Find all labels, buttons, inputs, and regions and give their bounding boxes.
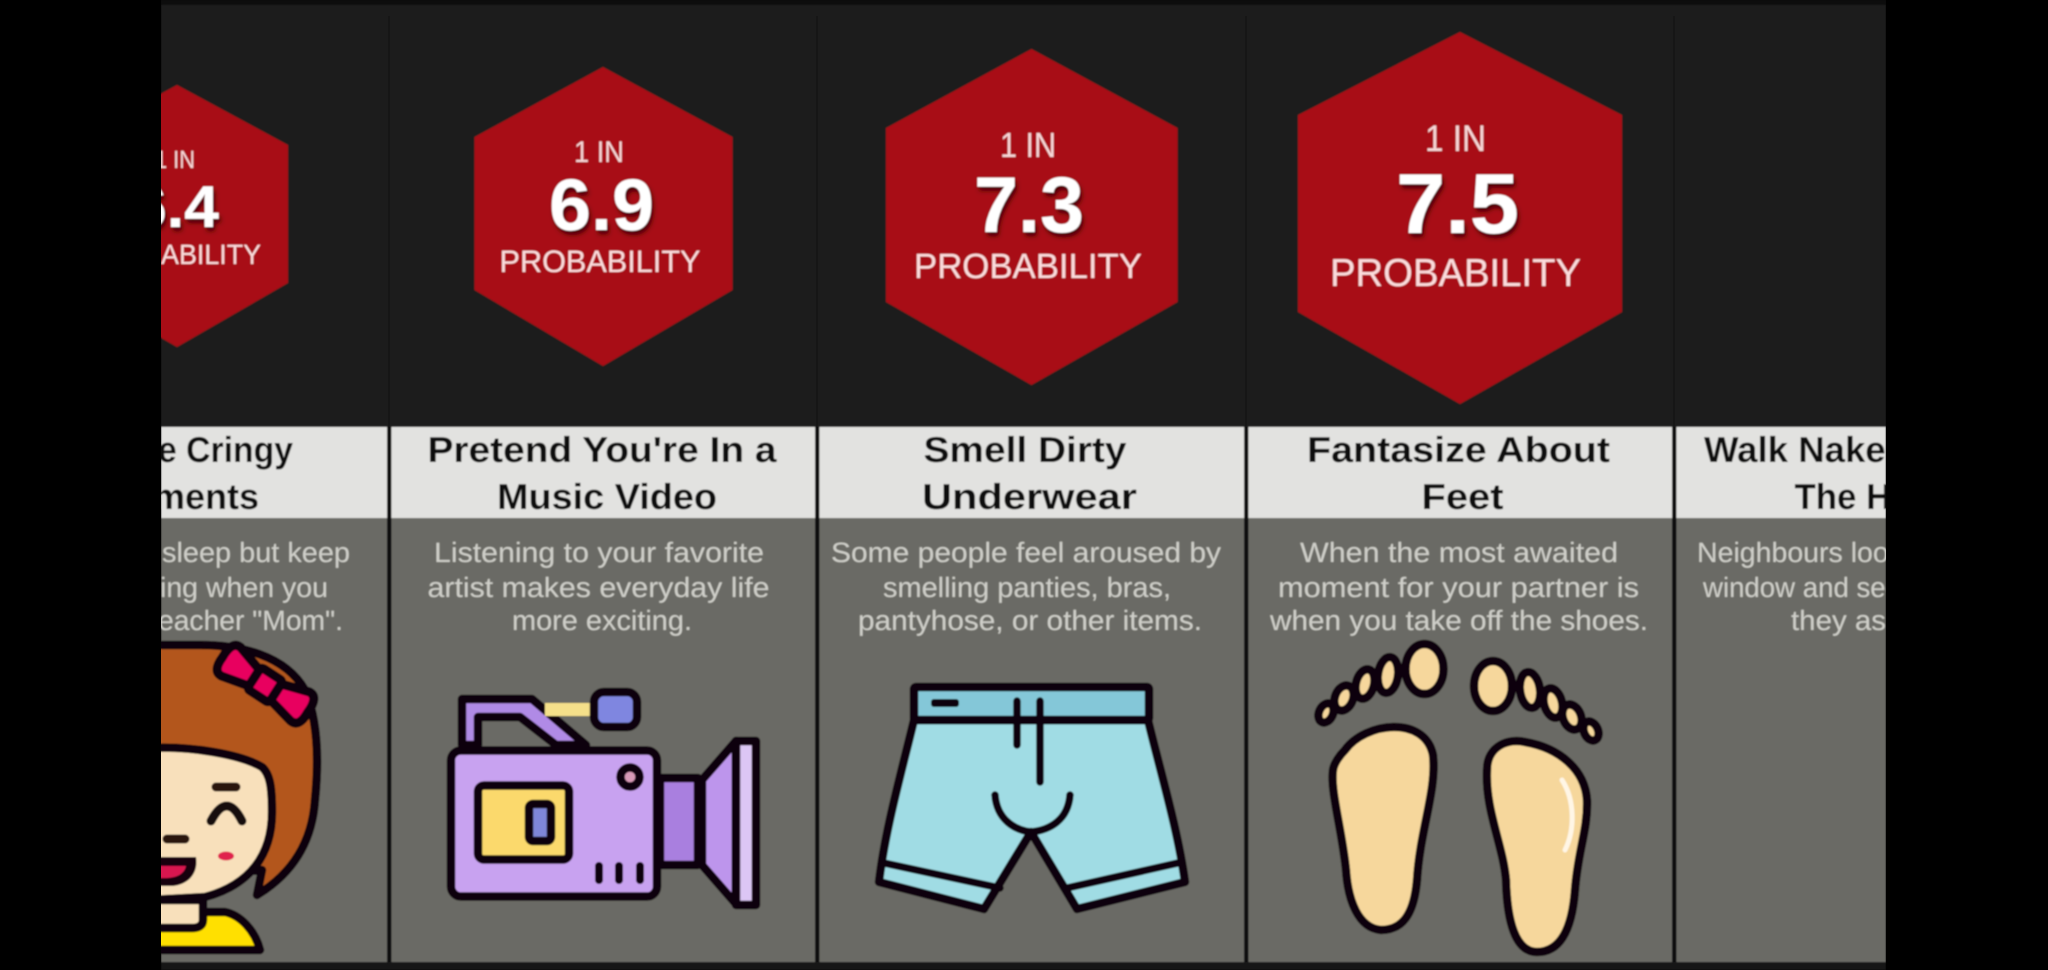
hexagon badge: 1 in 7.3: 7.3: [974, 160, 1084, 249]
hexagon badge: 1 in 6.4: 1 IN: [155, 146, 195, 174]
hexagon badge: 1 in 7.3: [886, 49, 1178, 385]
hexagon badge: 1 in 7.3: 1 IN: [1000, 126, 1056, 165]
title: [161, 434, 294, 510]
description: artist makes everyday life: [428, 572, 770, 603]
description: Some people feel aroused by: [831, 537, 1221, 568]
hexagon badge: 1 in 6.9: PROBABILITY: [500, 244, 700, 279]
hexagon badge: 1 in 6.4: [161, 84, 290, 348]
hexagon badge: 1 in 6.9: [474, 67, 732, 366]
hexagon badge: 1 in 6.9: 6.9: [549, 165, 654, 246]
title: [924, 434, 1138, 510]
hexagon badge: 1 in 7.5: PROBABILITY: [1330, 252, 1581, 295]
title: Underwear: [922, 476, 1137, 517]
description: eacher "Mom".: [158, 605, 343, 636]
description: When the most awaited: [1300, 537, 1618, 568]
title: ments: [153, 476, 259, 517]
icon: video camera: [451, 692, 756, 905]
description: more exciting.: [512, 605, 692, 636]
panel: pretend you're in a music video: [428, 67, 778, 905]
description: [1697, 537, 1904, 636]
description: [1269, 537, 1648, 636]
description: smelling panties, bras,: [883, 572, 1171, 603]
title: Feet: [1422, 476, 1504, 517]
title: [1308, 434, 1610, 510]
title: Pretend You're In a: [428, 429, 778, 470]
icon: bare feet: [1315, 644, 1602, 952]
title: e Cringy: [158, 429, 293, 470]
icon: laughing girl: [140, 642, 318, 950]
description: [831, 537, 1221, 636]
description: they as: [1791, 605, 1886, 636]
description: sleep but keep: [162, 537, 350, 568]
description: ing when you: [160, 572, 328, 603]
hexagon badge: 1 in 7.3: PROBABILITY: [914, 247, 1142, 286]
description: Listening to your favorite: [434, 537, 764, 568]
hexagon badge: 1 in 7.5: 7.5: [1396, 157, 1519, 252]
panel: smell dirty underwear: [831, 49, 1221, 909]
hexagon badge: 1 in 6.4: 6.4: [132, 174, 219, 240]
title: The House: [1794, 476, 1972, 517]
description: when you take off the shoes.: [1269, 605, 1648, 636]
hexagon badge: 1 in 7.5: [1298, 32, 1622, 404]
title: Smell Dirty: [924, 429, 1126, 470]
hexagon badge: 1 in 6.4: PROBABILITY: [85, 239, 261, 270]
description: pantyhose, or other items.: [858, 605, 1202, 636]
description: Neighbours look: [1697, 537, 1904, 568]
panel: cringy moments (clipped): [161, 84, 350, 955]
title: [1704, 429, 1972, 517]
hexagon badge: 1 in 7.5: 1 IN: [1425, 118, 1486, 159]
title: Fantasize About: [1307, 429, 1610, 470]
panel: fantasize about feet: [1269, 32, 1648, 952]
description: [428, 537, 770, 636]
description: window and see: [1702, 572, 1901, 603]
panel: walk naked (clipped): [1698, 434, 1886, 637]
description: [158, 537, 350, 636]
hexagon badge: 1 in 6.9: 1 IN: [574, 136, 624, 169]
icon: shorts: [879, 687, 1185, 909]
title: [429, 434, 778, 510]
title: Walk Naked: [1704, 429, 1908, 470]
description: moment for your partner is: [1278, 572, 1639, 603]
title: Music Video: [497, 476, 717, 517]
